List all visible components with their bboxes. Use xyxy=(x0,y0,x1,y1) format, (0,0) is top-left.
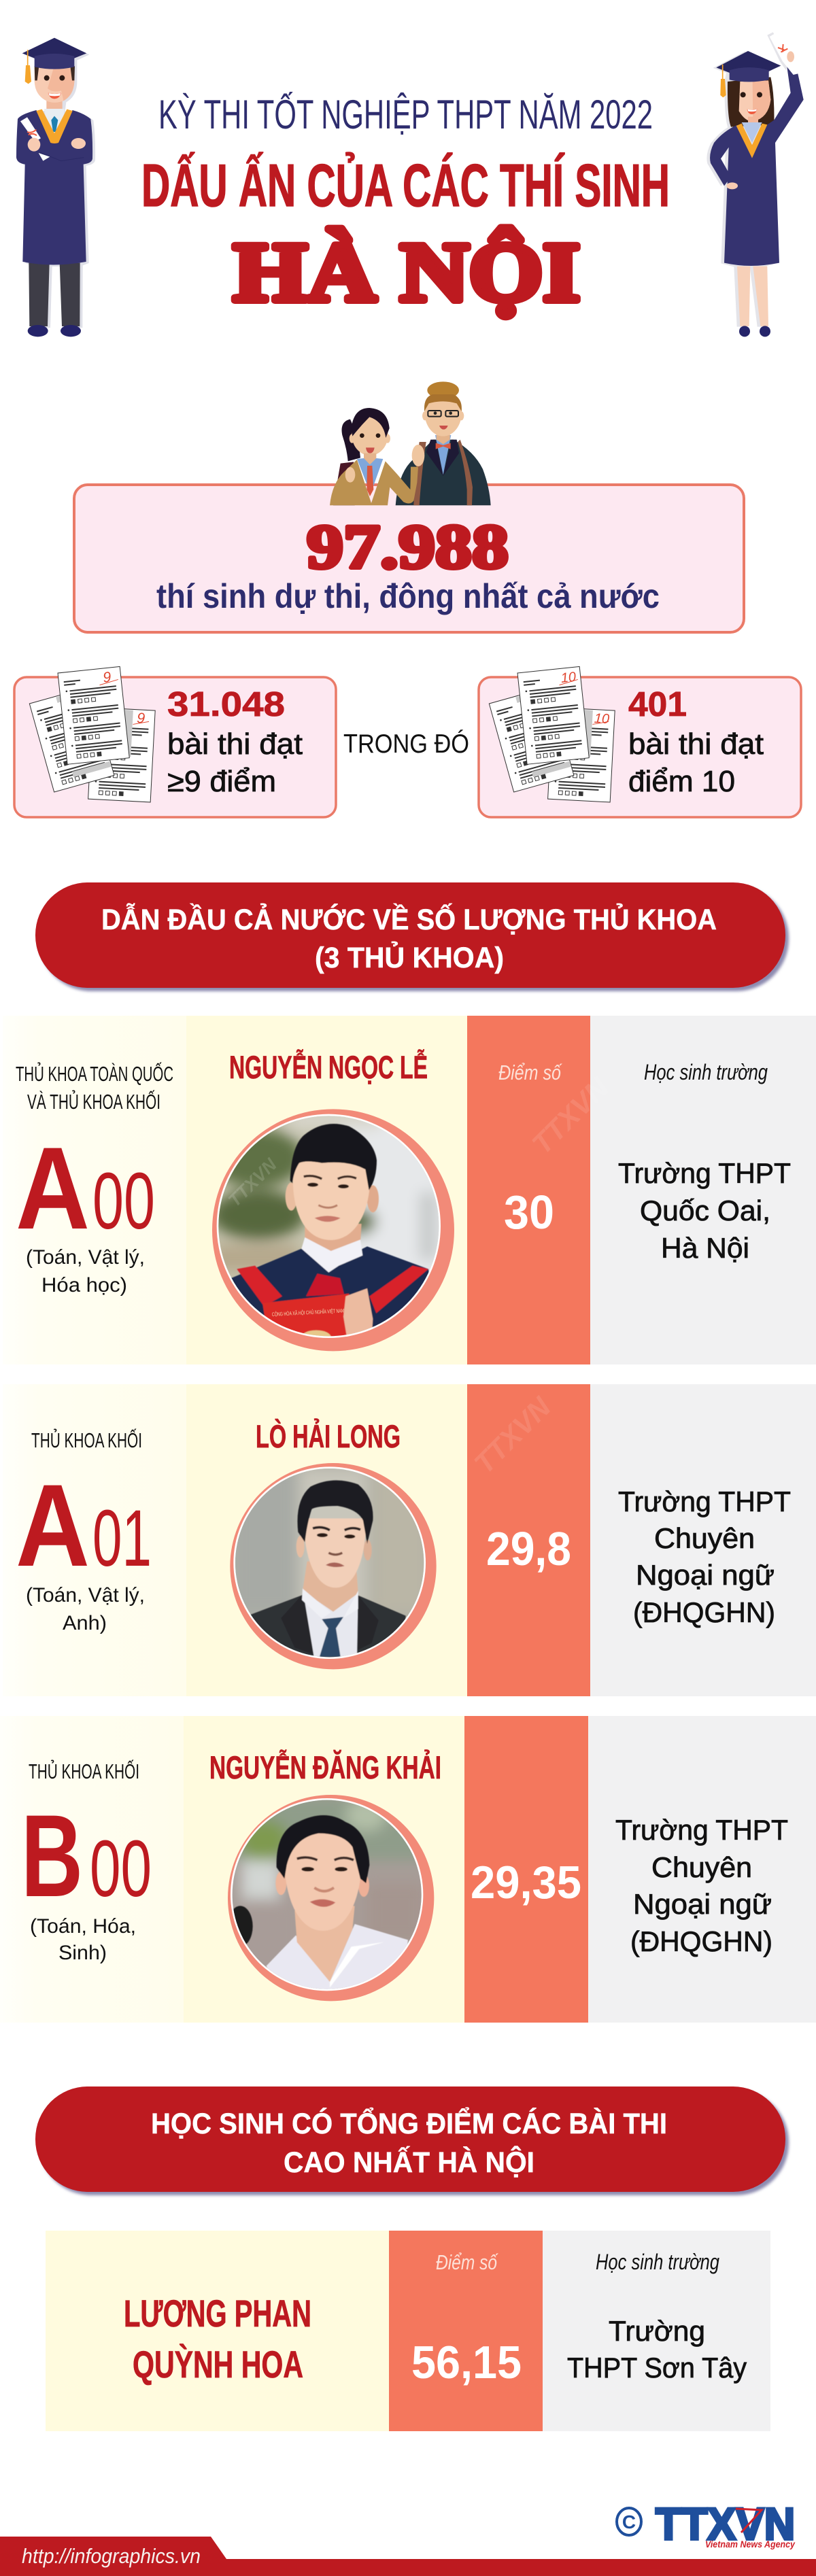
score value: 29,35 xyxy=(471,1857,581,1908)
panel: 401 exams xyxy=(479,666,801,817)
school label: Học sinh trường xyxy=(596,2250,719,2274)
icon: exam papers 10: 10 xyxy=(594,711,610,727)
photo: Nguyễn Ngọc Lễ xyxy=(212,1109,454,1352)
score value: 56,15 xyxy=(411,2337,522,2388)
name: NGUYỄN NGỌC LỄ xyxy=(229,1049,428,1085)
label: national top scorer: THỦ KHOA TOÀN QUỐC xyxy=(16,1061,173,1086)
score value: 29,8 xyxy=(486,1522,571,1575)
school name: (ĐHQGHN) xyxy=(633,1596,775,1628)
footer bar xyxy=(0,2537,816,2576)
banner line 2: (3 THỦ KHOA) xyxy=(315,941,504,974)
school name: Ngoại ngữ xyxy=(636,1559,775,1591)
banner line 1: HỌC SINH CÓ TỔNG ĐIỂM CÁC BÀI THI xyxy=(151,2106,667,2140)
school name: Trường THPT xyxy=(615,1814,788,1846)
illustration: male graduate xyxy=(16,38,95,337)
school name: THPT Sơn Tây xyxy=(567,2352,747,2384)
panel: total candidates xyxy=(74,485,744,632)
title xyxy=(141,92,670,319)
block code B: B xyxy=(21,1791,83,1921)
footer url: http://infographics.vn xyxy=(22,2544,201,2568)
logo: TTXVN xyxy=(617,2498,796,2549)
wordmark: TTXVN xyxy=(656,2498,795,2549)
banner line 2: CAO NHẤT HÀ NỘI xyxy=(284,2146,534,2179)
label: line two: VÀ THỦ KHOA KHỐI xyxy=(27,1089,160,1114)
score label: Điểm số xyxy=(436,2250,498,2274)
illustration: female graduate xyxy=(707,32,804,337)
panel: row A00 xyxy=(3,1016,816,1364)
school name: Quốc Oai, xyxy=(640,1195,770,1226)
icon: exam papers 9 xyxy=(29,666,155,802)
score value: 30 xyxy=(504,1186,554,1239)
school name xyxy=(618,1157,791,1264)
name line 2: QUỲNH HOA xyxy=(133,2343,303,2386)
school name: Chuyên xyxy=(651,1851,752,1883)
school name xyxy=(567,2315,747,2384)
number: 401: 401 xyxy=(628,685,687,723)
subjects: (Toán, Vật lý, xyxy=(26,1584,145,1607)
block code 00: 00 xyxy=(90,1824,152,1914)
label: block top scorer: THỦ KHOA KHỐI xyxy=(29,1759,139,1783)
subjects: (Toán, Vật lý, xyxy=(26,1246,145,1269)
photo: Nguyễn Ngọc Lễ: TTXVN xyxy=(224,1154,281,1211)
panel: row B00 xyxy=(0,1716,816,2023)
text: passing: bài thi đạt xyxy=(167,727,303,761)
school name: Trường THPT xyxy=(618,1157,791,1189)
name: NGUYỄN ĐĂNG KHẢI xyxy=(209,1749,441,1785)
photo: Nguyễn Đăng Khải xyxy=(228,1795,434,2002)
banner: leading the country xyxy=(35,882,789,991)
panel: 31.048 exams xyxy=(14,666,336,817)
panel: row A01 xyxy=(3,1384,816,1696)
number: 97.988: 97.988 xyxy=(307,512,509,581)
globe swoosh xyxy=(736,2509,762,2532)
block code 00: 00 xyxy=(92,1156,155,1246)
icon: exam papers 9: 9 xyxy=(102,669,112,686)
panel: top student xyxy=(46,2231,770,2431)
tagline: Vietnam News Agency xyxy=(705,2539,796,2549)
place name: HÀ NỘI xyxy=(233,226,580,319)
school name xyxy=(618,1486,791,1628)
icon: exam papers 10 xyxy=(489,666,615,802)
school name: Ngoại ngữ xyxy=(633,1888,772,1920)
text: score: điểm 10 xyxy=(628,765,735,798)
subjects line 2: Sinh) xyxy=(58,1942,107,1964)
number: 31.048: 31.048 xyxy=(167,685,285,723)
block code A: A xyxy=(16,1123,90,1254)
block code A: A xyxy=(16,1460,90,1591)
label: block top scorer: THỦ KHOA KHỐI xyxy=(31,1428,142,1452)
score label: Điểm số xyxy=(498,1061,562,1084)
icon: exam papers 10: 10 xyxy=(560,670,577,686)
illustration: students xyxy=(330,381,491,505)
watermark: TTXVN xyxy=(468,1390,558,1479)
subjects: (Toán, Hóa, xyxy=(30,1915,136,1938)
school name: Chuyên xyxy=(654,1522,755,1554)
school name xyxy=(615,1814,788,1957)
photo: Lò Hải Long xyxy=(224,1455,442,1672)
school name: Trường THPT xyxy=(618,1486,791,1517)
text: TRONG ĐÓ: TRONG ĐÓ xyxy=(343,729,469,759)
photo: Nguyễn Ngọc Lễ: CỘNG HÒA XÃ HỘI CHỦ NGHĨA VIỆT NAM xyxy=(272,1307,345,1318)
school name: Trường xyxy=(609,2315,705,2347)
text: score: ≥9 điểm xyxy=(167,765,276,798)
name line 1: LƯƠNG PHAN xyxy=(124,2292,311,2335)
icon: exam papers 9: 9 xyxy=(137,710,146,727)
block code 01: 01 xyxy=(92,1494,152,1583)
name: LÒ HẢI LONG xyxy=(256,1418,401,1454)
banner: highest total score xyxy=(35,2086,789,2195)
text: passing: bài thi đạt xyxy=(628,727,764,761)
caption: thí sinh dự thi, đông nhất cả nước xyxy=(156,577,660,615)
copyright mark xyxy=(617,2508,641,2535)
banner line 1: DẪN ĐẦU CẢ NƯỚC VỀ SỐ LƯỢNG THỦ KHOA xyxy=(101,903,717,936)
school name: Hà Nội xyxy=(661,1232,749,1264)
copyright mark: C xyxy=(622,2511,636,2532)
subjects line 2: Anh) xyxy=(63,1612,107,1634)
subjects line 2: Hóa học) xyxy=(41,1274,127,1296)
school name: (ĐHQGHN) xyxy=(630,1925,772,1957)
school label: Học sinh trường xyxy=(644,1060,768,1084)
watermark: TTXVN xyxy=(526,1071,615,1160)
